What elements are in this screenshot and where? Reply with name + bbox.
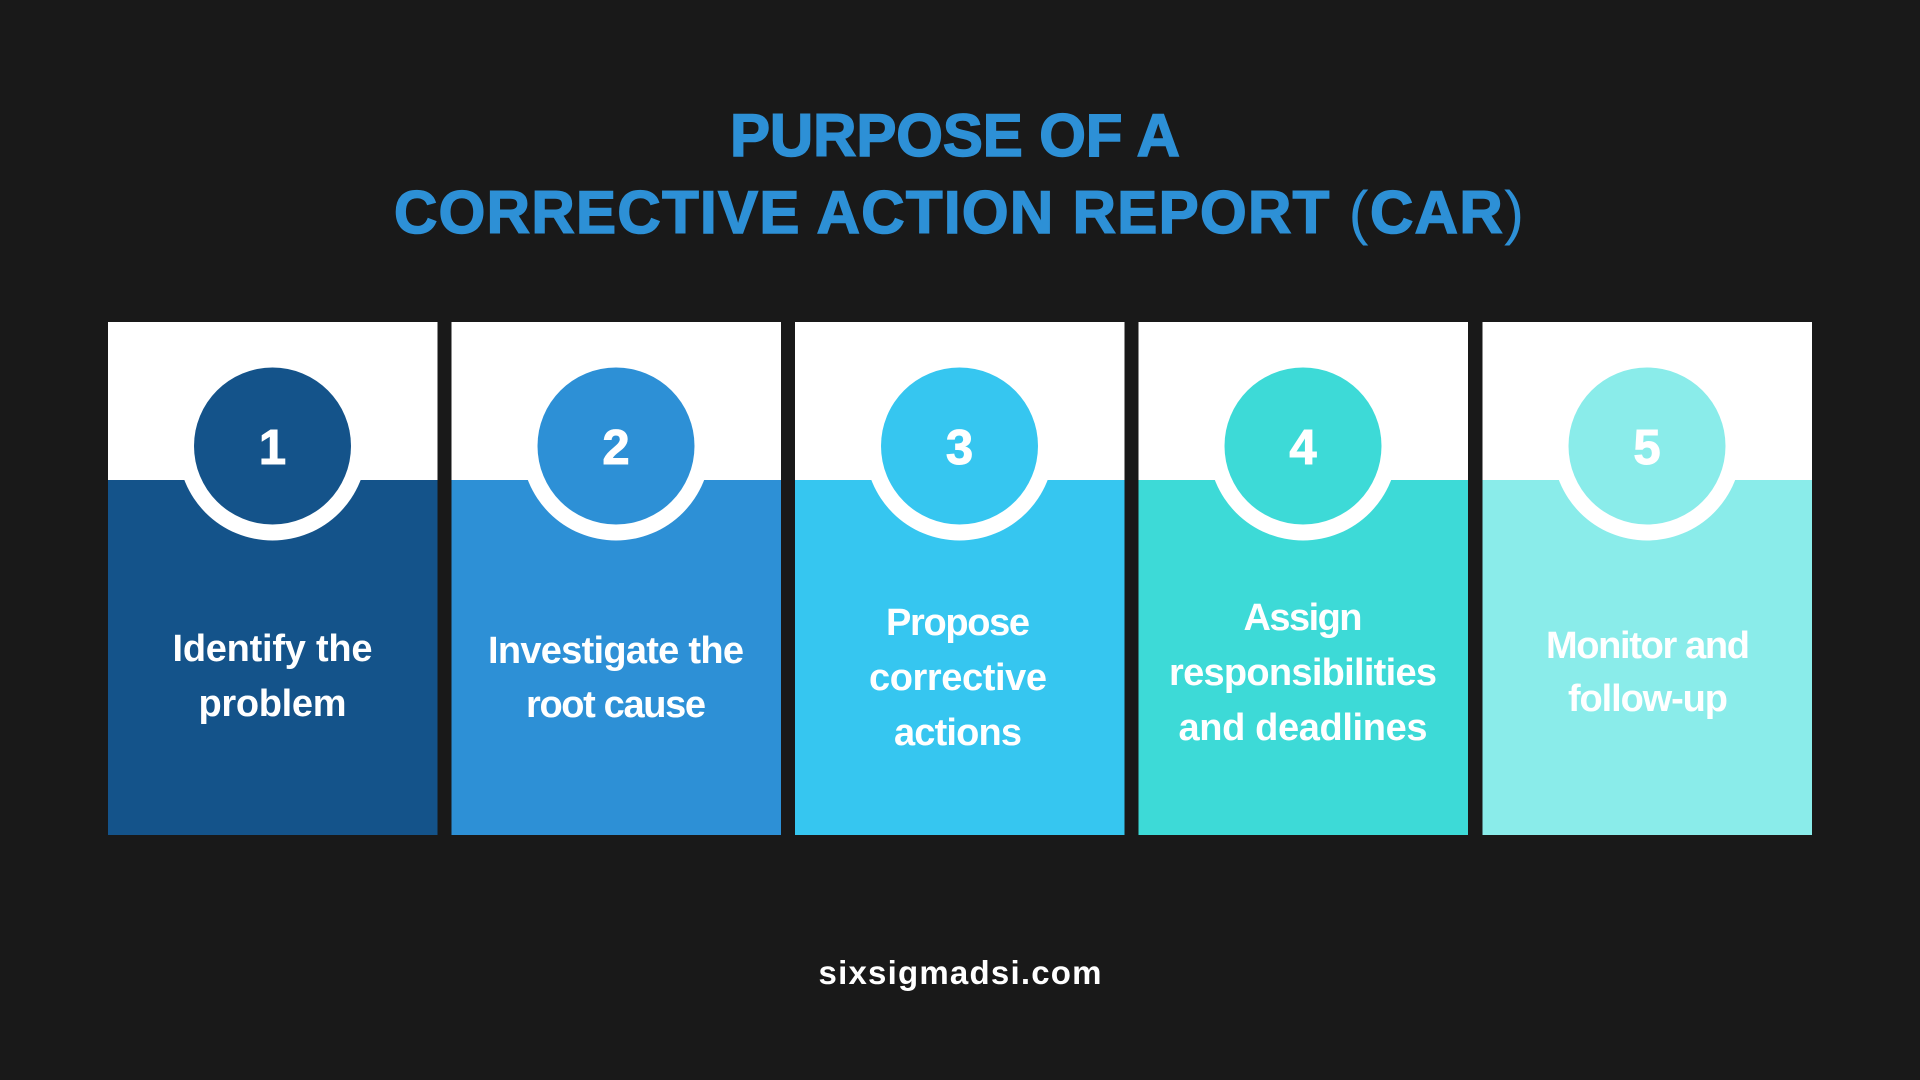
text: step 3 label: Propose (886, 602, 1030, 644)
icon: number badge 4 (1224, 368, 1382, 524)
panel: step 3 (795, 322, 1124, 835)
panel: step 4 (1138, 322, 1468, 835)
title: PURPOSE OF A (730, 102, 1180, 169)
text: step 5 label: Monitor and (1546, 625, 1750, 667)
icon: number badge 2 (538, 368, 694, 524)
text: step 2 label: root cause (526, 684, 706, 726)
text: step 4 label (1169, 597, 1437, 749)
icon: number badge 3 (881, 368, 1038, 524)
text: step 2 label (488, 630, 744, 726)
footer: website: sixsigmadsi.com (818, 954, 1102, 991)
text: step 4 label: and deadlines (1178, 707, 1428, 749)
text: step 1 label: Identify the (172, 628, 372, 670)
text: step 2 label: Investigate the (488, 630, 744, 672)
panel: step 5 (1482, 322, 1812, 835)
icon: number badge 5: 5 (1633, 421, 1661, 475)
icon: number badge 3: 3 (946, 421, 973, 475)
title (394, 102, 1524, 246)
text: step 5 label (1546, 625, 1750, 720)
title: CORRECTIVE ACTION REPORT (CAR) (394, 179, 1524, 246)
icon: number badge 2: 2 (602, 421, 630, 475)
text: step 5 label: follow-up (1568, 678, 1728, 720)
text: step 4 label: responsibilities (1169, 652, 1437, 694)
text: step 3 label: actions (894, 712, 1022, 754)
panel: step 2 (452, 322, 781, 835)
text: step 3 label (869, 602, 1047, 754)
icon: number badge 5 (1568, 368, 1726, 524)
text: step 3 label: corrective (869, 657, 1047, 699)
icon: number badge 1: 1 (259, 421, 286, 475)
icon: number badge 1 (194, 368, 351, 524)
icon: number badge 4: 4 (1289, 421, 1317, 475)
panel: step 1 (108, 322, 438, 835)
text: step 1 label: problem (198, 683, 346, 725)
text: step 4 label: Assign (1244, 597, 1362, 639)
text: step 1 label (172, 628, 372, 725)
